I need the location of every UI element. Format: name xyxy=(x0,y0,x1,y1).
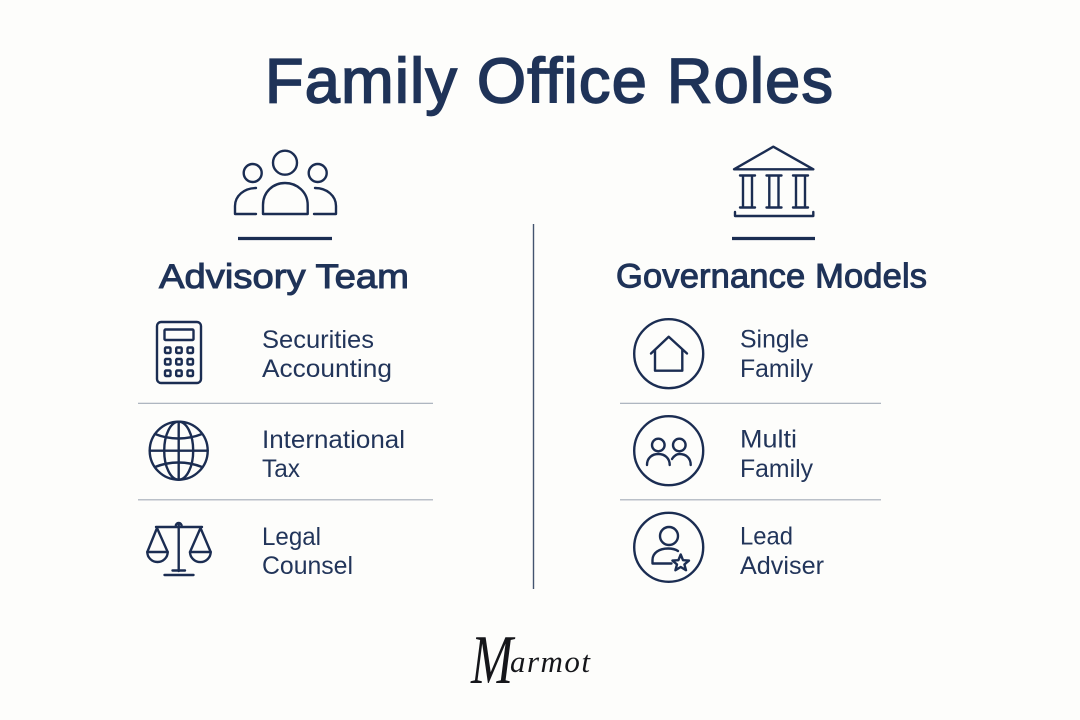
row: multi family xyxy=(634,416,813,485)
title: Family Office Roles xyxy=(265,47,833,117)
label: international tax: Tax xyxy=(262,455,300,483)
row: legal counsel xyxy=(147,523,353,580)
heading underline xyxy=(238,237,332,240)
row: single family xyxy=(634,319,813,388)
label: single family: Single xyxy=(740,326,809,354)
row: lead adviser xyxy=(634,513,824,582)
label: lead adviser: Lead xyxy=(740,522,793,550)
icon: house in circle xyxy=(634,319,703,388)
icon: globe xyxy=(150,422,208,480)
icon: calculator xyxy=(157,322,201,383)
label: securities accounting: Securities xyxy=(262,326,374,354)
heading: advisory team: Advisory Team xyxy=(159,258,409,296)
label: legal counsel: Legal xyxy=(262,523,321,551)
label: multi family: Multi xyxy=(740,426,797,454)
signature logo: armot xyxy=(510,644,591,679)
panel: governance models xyxy=(616,147,927,582)
icon: scales of justice xyxy=(147,523,211,575)
label: lead adviser: Adviser xyxy=(740,552,824,580)
row: securities accounting xyxy=(157,322,392,383)
icon: institution building xyxy=(734,147,813,216)
icon: team of people xyxy=(235,151,336,214)
panel: advisory team xyxy=(138,151,433,580)
heading underline xyxy=(732,237,815,240)
icon: person with star in circle xyxy=(634,513,703,582)
label: multi family: Family xyxy=(740,455,813,483)
heading: governance models: Governance Models xyxy=(616,258,927,296)
label: single family: Family xyxy=(740,355,813,383)
signature logo: M xyxy=(470,622,516,699)
icon: two people in circle xyxy=(634,416,703,485)
label: securities accounting: Accounting xyxy=(262,355,392,383)
row: international tax xyxy=(150,422,405,483)
label: international tax: International xyxy=(262,426,405,454)
label: legal counsel: Counsel xyxy=(262,552,353,580)
